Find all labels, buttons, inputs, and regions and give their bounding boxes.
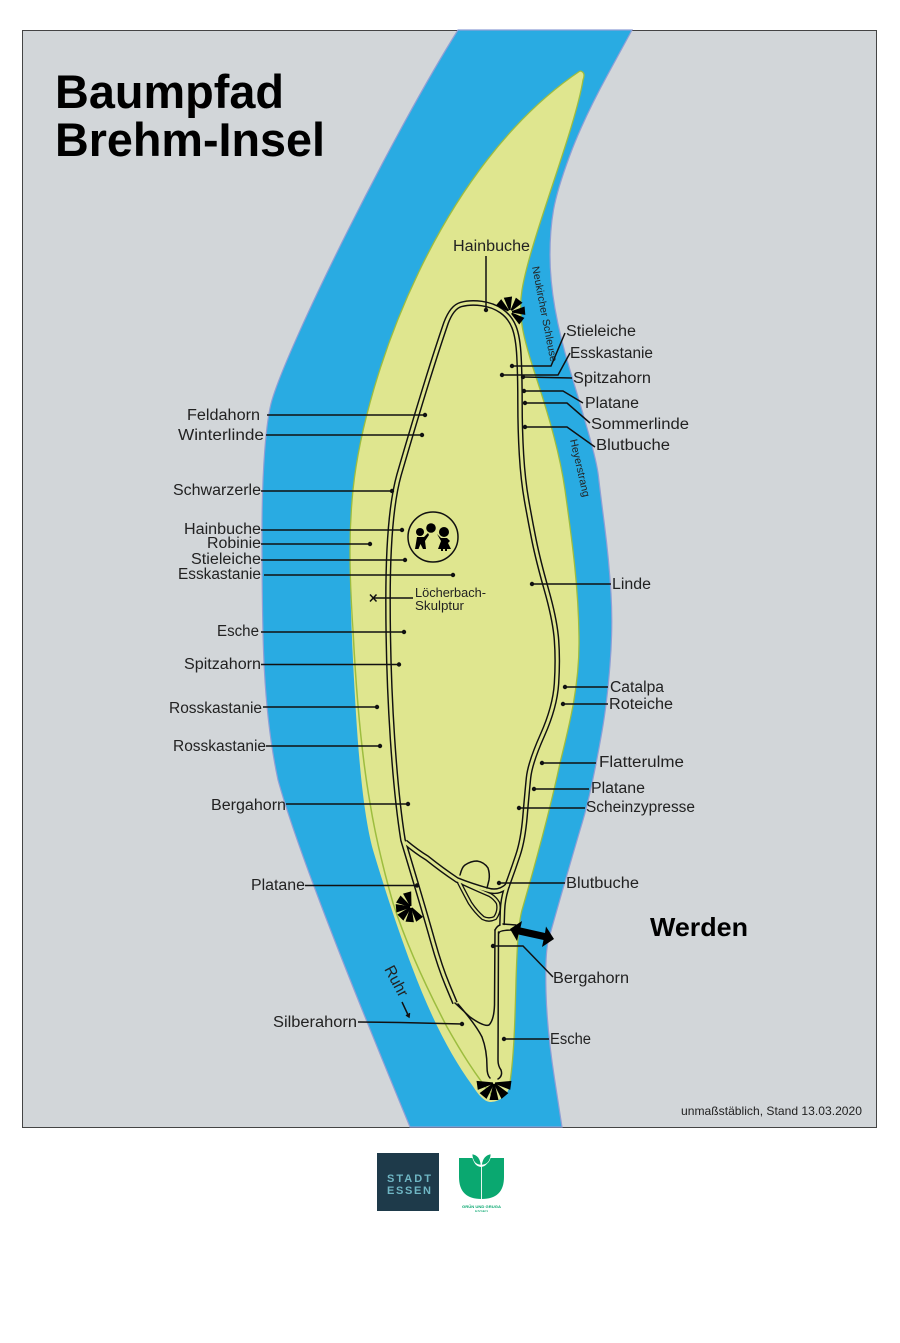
title [55,65,325,166]
icon: viewpoint west [396,891,423,922]
icon: children playground [408,512,458,562]
tree label: Scheinzypresse [517,799,695,816]
tree label: Hainbuche [184,521,404,538]
arrow: bridge to Werden [510,921,554,947]
icon: viewpoint north [496,297,525,325]
tree label: Flatterulme: Flatterulme [599,754,684,771]
tree label: Esche [217,623,406,640]
tree label: Platane east: Platane [585,395,639,412]
tree label: Blutbuche east: Blutbuche [596,437,670,454]
tree label: Rosskastanie lower: Rosskastanie [173,738,266,755]
tree label: Esskastanie east [500,345,653,377]
tree label: Rosskastanie: Rosskastanie [169,700,262,717]
tree label: Platane east [522,389,639,412]
logo: Stadt Essen: ESSEN [387,1185,431,1197]
place label: Werden: Werden [650,912,748,942]
tree label: Rosskastanie [169,700,379,717]
tree label: Schwarzerle: Schwarzerle [173,482,261,499]
tree label: Spitzahorn [184,656,401,673]
tree label: Silberahorn [273,1014,464,1031]
tree label: Silberahorn: Silberahorn [273,1014,357,1031]
tree label: Esche south [502,1031,591,1048]
panel: map background [22,30,876,1128]
tree label: Esche: Esche [217,623,259,640]
tree label: Bergahorn south: Bergahorn [553,970,629,987]
tree label: Feldahorn: Feldahorn [187,407,260,424]
logo: Stadt Essen [377,1153,439,1211]
footpaths [388,303,557,1079]
river Ruhr [262,30,632,1127]
tree label: Platane west [251,877,419,894]
tree label: Platane west: Platane [251,877,305,894]
icon: viewpoint south [477,1079,511,1100]
tree label: Esskastanie [178,566,455,583]
tree label: Roteiche [561,696,673,713]
logo: Grün und Gruga: GRÜN UND GRUGA [462,1204,501,1209]
tree label: Stieleiche [191,551,407,568]
tree label: Stieleiche east [510,323,636,368]
tree label: Platane south [532,780,645,797]
tree label: Blutbuche east [523,425,670,454]
tree label: Scheinzypresse: Scheinzypresse [586,799,695,816]
tree label: Roteiche: Roteiche [609,696,673,713]
tree label: Hainbuche: Hainbuche [184,521,261,538]
tree label: Hainbuche top [453,238,530,312]
tree label: Feldahorn [187,407,427,424]
logo: Stadt Essen: STADT [387,1173,431,1185]
river label: Ruhr: Ruhr [380,963,411,1001]
island [350,71,584,1102]
tree label: Catalpa: Catalpa [610,679,664,696]
tree label: Schwarzerle [173,482,394,499]
tree label: Hainbuche top: Hainbuche [453,238,530,255]
callout: Löcherbach-Skulptur [370,586,486,613]
tree label: Stieleiche: Stieleiche [191,551,261,568]
tree label: Esskastanie east: Esskastanie [570,345,653,362]
tree label: Bergahorn: Bergahorn [211,797,286,814]
logo: Grün und Gruga [459,1154,504,1213]
tree label: Blutbuche south: Blutbuche [566,875,639,892]
note: scale and date: unmaßstäblich, Stand 13.03.2020 [681,1104,862,1118]
tree label: Robinie: Robinie [207,535,261,552]
tree label: Robinie [207,535,372,552]
tree label: Catalpa [563,679,664,696]
tree label: Esskastanie: Esskastanie [178,566,261,583]
tree label: Linde [530,576,651,593]
tree label: Bergahorn south [491,944,629,987]
title: Brehm-Insel [55,113,325,166]
tree label: Winterlinde [178,427,424,444]
tree label: Blutbuche south [497,875,639,892]
tree label: Linde: Linde [612,576,651,593]
tree label: Flatterulme [540,754,684,771]
tree label: Spitzahorn east: Spitzahorn [573,370,651,387]
water label: Neukircher Schleuse: Neukircher Schleuse [529,265,559,363]
callout: Löcherbach-Skulptur: Skulptur [415,599,464,613]
tree label: Spitzahorn: Spitzahorn [184,656,261,673]
title: Baumpfad [55,65,284,118]
tree label: Stieleiche east: Stieleiche [566,323,636,340]
logo: Grün und Gruga: ESSEN [475,1209,488,1213]
tree label: Winterlinde: Winterlinde [178,427,264,444]
tree label: Platane south: Platane [591,780,645,797]
water label: Heyerstrang: Heyerstrang [567,438,592,498]
callout: Löcherbach-Skulptur: Löcherbach- [415,586,486,600]
tree label: Sommerlinde [523,401,689,433]
tree label: Spitzahorn east [521,370,651,387]
tree label: Sommerlinde: Sommerlinde [591,416,689,433]
tree label: Rosskastanie lower [173,738,382,755]
tree label: Esche south: Esche [550,1031,591,1048]
tree label: Bergahorn [211,797,410,814]
